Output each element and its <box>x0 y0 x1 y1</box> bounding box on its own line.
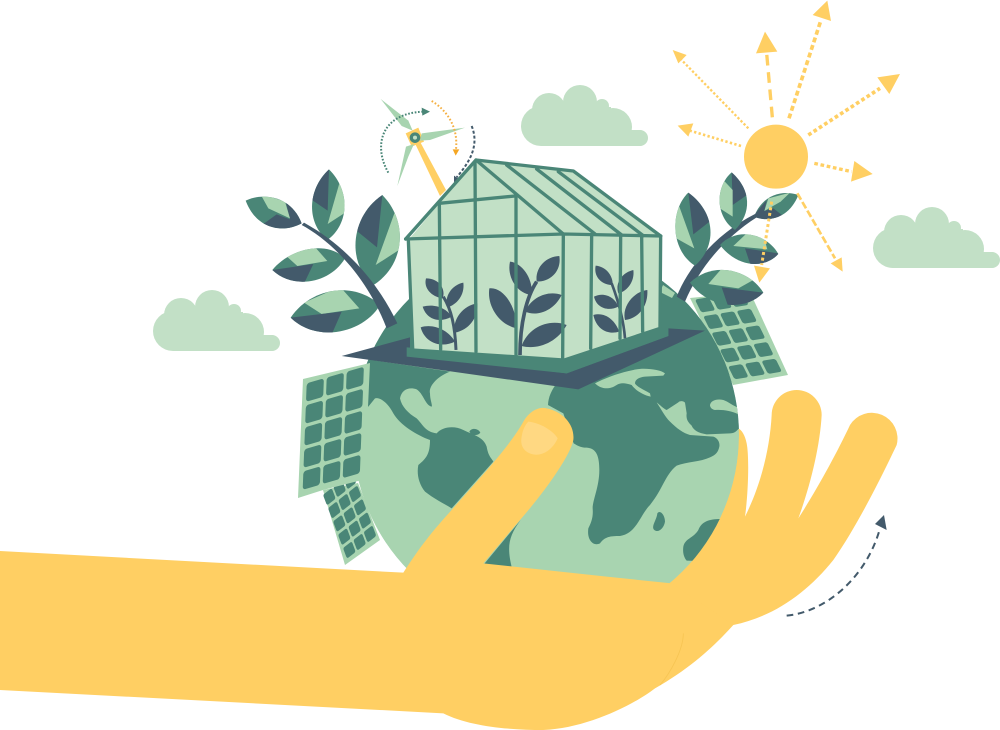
globe <box>358 280 739 584</box>
plant: right branch <box>668 172 798 312</box>
plant: left branch <box>246 169 407 338</box>
cloud: right <box>873 207 1000 268</box>
curved dashed arrow beside hand <box>787 515 887 616</box>
cloud: left <box>153 290 280 351</box>
hand: fingers behind the globe <box>633 390 898 627</box>
solar panel: right <box>690 292 788 385</box>
plants inside greenhouse <box>421 256 647 347</box>
solar panel: lower left <box>323 472 380 565</box>
americas <box>366 360 520 566</box>
africa and eurasia <box>548 360 739 544</box>
sun with rays <box>673 1 900 283</box>
greenhouse glass <box>408 160 662 358</box>
greenhouse frame <box>406 160 661 358</box>
madagascar <box>653 512 665 531</box>
greenhouse ground shadow <box>342 328 705 389</box>
thumbnail <box>521 422 558 455</box>
light land patches <box>595 369 738 414</box>
greenhouse <box>342 160 705 389</box>
hand: palm, arm and thumb in front of the globe <box>0 408 733 730</box>
solar panel: left <box>298 363 370 498</box>
cloud: top centre <box>521 85 648 146</box>
greenhouse base <box>407 326 668 373</box>
australia <box>683 519 720 561</box>
wind turbine <box>381 99 474 196</box>
